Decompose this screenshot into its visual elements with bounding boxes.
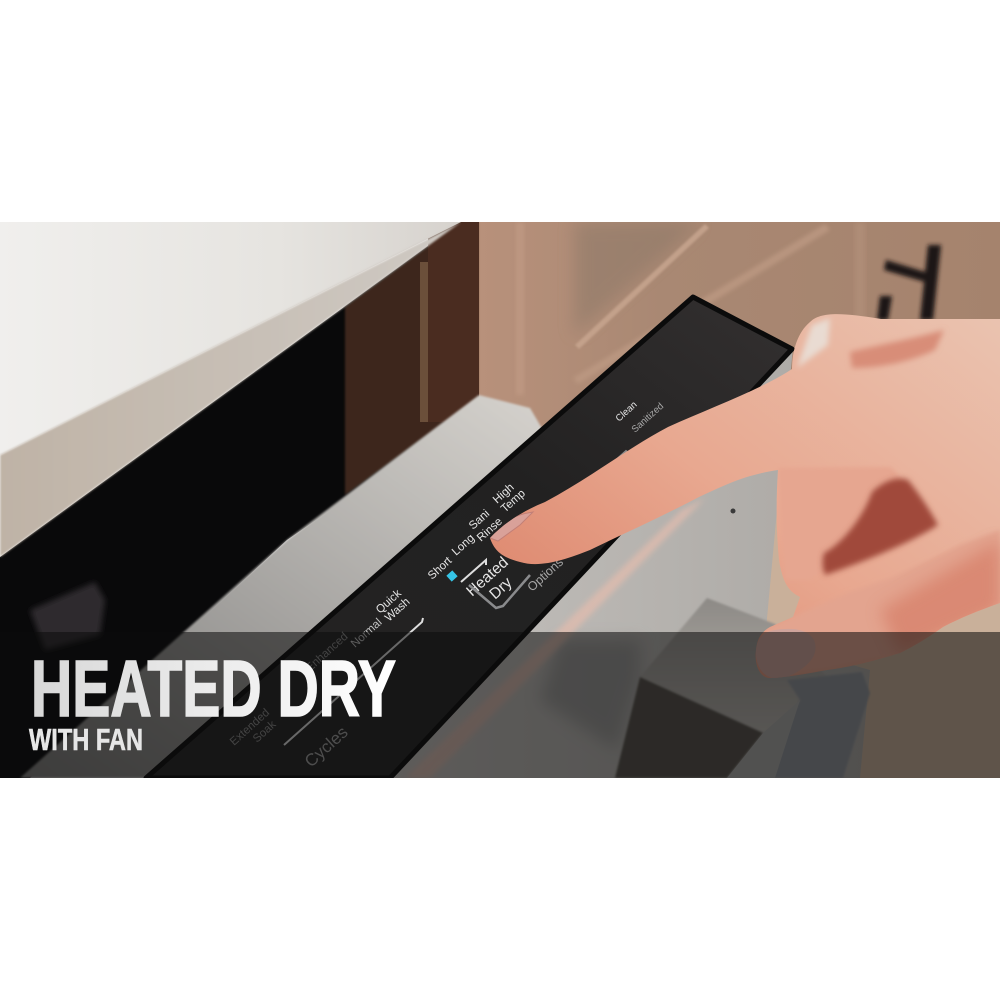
knuckle redness bbox=[850, 330, 944, 368]
panel labels: Wash bbox=[383, 596, 413, 624]
blue indicator bbox=[446, 570, 458, 582]
curled finger bbox=[816, 468, 897, 506]
panel labels: Sani bbox=[467, 508, 492, 532]
darker steel shade bbox=[546, 642, 637, 740]
wall lower right bbox=[766, 514, 1000, 778]
pink reflection strip bbox=[405, 498, 705, 778]
subtitle: With Fan: WITH FAN bbox=[29, 722, 143, 757]
panel labels: Soak bbox=[251, 719, 279, 745]
panel labels: Temp bbox=[499, 487, 528, 515]
panel labels: Clean bbox=[614, 399, 639, 424]
photo: dishwasher control panel bbox=[0, 222, 1000, 780]
photo infographic bbox=[0, 222, 1000, 778]
door handle bbox=[615, 598, 870, 778]
panel labels: Dry bbox=[486, 574, 516, 603]
panel labels: Sanitized bbox=[630, 401, 666, 435]
panel labels: Long bbox=[450, 532, 477, 558]
panel labels: Normal bbox=[349, 617, 385, 650]
panel labels: High bbox=[491, 481, 517, 506]
indicator brackets bbox=[284, 451, 640, 745]
countertop bbox=[0, 222, 461, 557]
shadow between fingers bbox=[823, 478, 938, 575]
thumb shading bbox=[764, 532, 1000, 632]
screw bbox=[730, 508, 736, 514]
title: Heated Dry: HEATED DRY bbox=[31, 644, 396, 733]
thumb reddish edge bbox=[880, 540, 1000, 655]
skin base bbox=[490, 314, 1000, 678]
dark title band bbox=[0, 632, 1000, 778]
hand bbox=[490, 314, 1000, 678]
panel labels: Short bbox=[426, 554, 455, 582]
panel labels: Cycles bbox=[301, 723, 352, 771]
wood cabinet bbox=[479, 222, 1000, 428]
heated dry button outline bbox=[469, 575, 530, 608]
fingernail bbox=[490, 512, 533, 541]
panel labels: Options bbox=[525, 555, 566, 594]
knuckle highlight bbox=[797, 318, 830, 368]
steel door top bbox=[20, 395, 550, 778]
control panel bbox=[146, 297, 792, 778]
panel labels: Enhanced bbox=[304, 631, 350, 674]
cabinet handle bbox=[877, 245, 941, 320]
panel labels bbox=[228, 399, 666, 771]
steel door front bbox=[390, 348, 870, 778]
panel labels: Heated bbox=[463, 554, 512, 600]
panel labels: Rinse bbox=[475, 516, 505, 544]
dark glass and cabinet side bbox=[0, 222, 490, 778]
panel labels: Quick bbox=[374, 587, 404, 616]
panel labels: Extended bbox=[228, 707, 272, 748]
thumbnail bbox=[756, 629, 816, 679]
